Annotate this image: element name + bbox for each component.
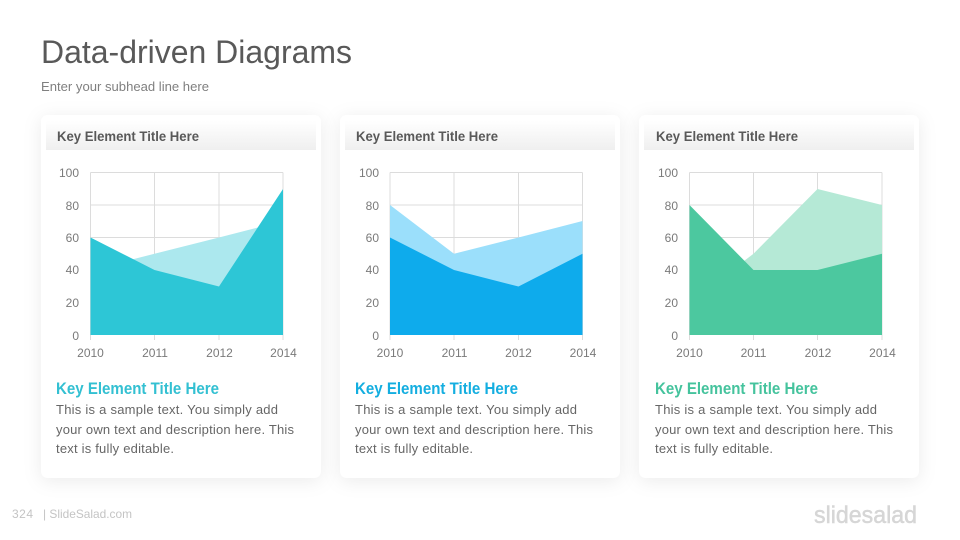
description heading: Key Element Title Here [355, 380, 518, 398]
card header band [644, 121, 914, 150]
area chart: blue: 60 [366, 231, 379, 245]
area chart: teal: 2014 [270, 346, 297, 360]
area chart: green: 80 [665, 199, 678, 213]
logo: slidesalad wordmark: slidesalad [814, 502, 917, 529]
area chart: green: 100 [658, 166, 678, 180]
description text [56, 402, 294, 456]
panel: teal chart card [41, 115, 321, 478]
area chart: teal: 40 [66, 263, 79, 277]
card heading: Key Element Title Here [356, 128, 498, 144]
card header band [46, 121, 316, 150]
description text [655, 402, 894, 456]
area chart: green: 2011 [741, 346, 767, 360]
area chart: teal: 2012 [206, 346, 233, 360]
area chart: green: 20 [665, 296, 678, 310]
area chart: teal: 0 [72, 329, 79, 343]
card header band [345, 121, 615, 150]
area chart: teal: 60 [66, 231, 79, 245]
area chart: green: 60 [665, 231, 678, 245]
description text: This is a sample text. You simply add [56, 402, 278, 417]
area chart: green: 2010 [676, 346, 703, 360]
area chart: teal [59, 166, 297, 360]
description heading: Key Element Title Here [56, 380, 219, 398]
area chart: teal: 20 [66, 296, 79, 310]
card background [340, 115, 620, 478]
area chart: green: 2014 [869, 346, 896, 360]
panel: green chart card [639, 115, 919, 478]
card heading: Key Element Title Here [656, 128, 798, 144]
area chart: teal: 2010 [77, 346, 104, 360]
subhead: Enter your subhead line here [41, 79, 209, 94]
description heading: Key Element Title Here [655, 380, 818, 398]
area chart: green: 2012 [805, 346, 832, 360]
page number: 324 [12, 507, 33, 521]
description text: This is a sample text. You simply add [355, 402, 577, 417]
area chart: green [658, 166, 896, 360]
area chart: blue: 0 [372, 329, 379, 343]
area chart: green: 0 [671, 329, 678, 343]
title: Data-driven Diagrams [41, 34, 352, 70]
area chart: blue: 2014 [570, 346, 597, 360]
card background [41, 115, 321, 478]
area chart: blue: 40 [366, 263, 379, 277]
area chart: blue: 2012 [505, 346, 532, 360]
footer source: | SlideSalad.com [43, 507, 132, 521]
area chart: teal: 80 [66, 199, 79, 213]
description text: text is fully editable. [655, 441, 773, 456]
description text: text is fully editable. [355, 441, 473, 456]
description text: This is a sample text. You simply add [655, 402, 877, 417]
card heading: Key Element Title Here [57, 128, 199, 144]
area chart: teal: 2011 [142, 346, 168, 360]
area chart: green: 40 [665, 263, 678, 277]
description text: text is fully editable. [56, 441, 174, 456]
area chart: teal: 100 [59, 166, 79, 180]
area chart: blue: 2010 [377, 346, 404, 360]
area chart: blue: 80 [366, 199, 379, 213]
description text: your own text and description here. This [355, 422, 594, 437]
area chart: blue: 100 [359, 166, 379, 180]
description text: your own text and description here. This [655, 422, 894, 437]
area chart: blue [359, 166, 597, 360]
card background [639, 115, 919, 478]
area chart: blue: 2011 [442, 346, 468, 360]
description text [355, 402, 594, 456]
area chart: blue: 20 [366, 296, 379, 310]
description text: your own text and description here. This [56, 422, 294, 437]
panel: blue chart card [340, 115, 620, 478]
